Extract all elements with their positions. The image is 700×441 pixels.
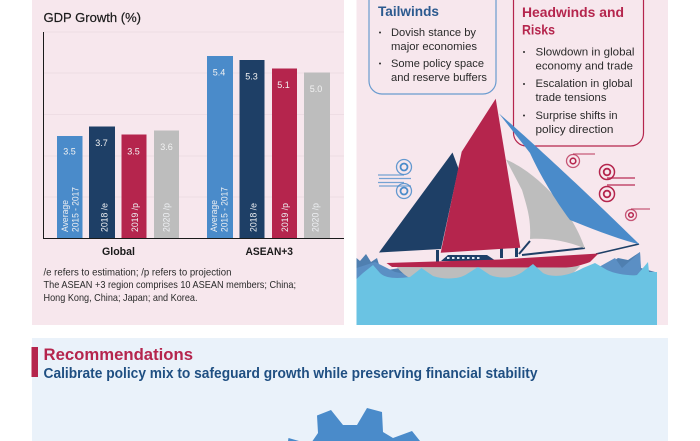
bar chart — [44, 32, 344, 238]
back waves — [356, 252, 657, 282]
illustration: sailboat — [356, 99, 657, 282]
callout: headwinds and risks: Risks — [522, 22, 555, 38]
bar chart: 5.4 — [213, 68, 225, 78]
subheading: Calibrate policy mix to safeguard growth while preserving financial stability — [44, 366, 538, 382]
axis label: Global: Global — [102, 246, 135, 258]
sea — [356, 262, 657, 325]
bar chart: 2015 - 2017 — [220, 187, 230, 232]
bar chart: 2020 /p — [310, 203, 322, 232]
sail: red — [441, 99, 520, 253]
bar chart: Average — [209, 200, 220, 232]
sail: grey — [506, 160, 585, 248]
callout: headwinds and risks: Headwinds and — [522, 4, 624, 20]
callout: headwinds and risks: Slowdown in global — [536, 46, 634, 58]
callout: tailwinds: Some policy space — [391, 58, 484, 70]
bar chart: 2019 /p — [130, 203, 141, 232]
bar chart: 2020 /p — [162, 203, 172, 232]
callout: headwinds and risks: economy and trade — [536, 60, 633, 72]
bar chart: 5.3 — [245, 72, 258, 82]
callout: tailwinds: Dovish stance by — [391, 27, 477, 39]
hull — [396, 266, 580, 280]
icon: gear — [288, 408, 420, 441]
bar chart: 3.7 — [95, 138, 108, 148]
sail: blue jib — [499, 114, 640, 244]
footnotes: Hong Kong, China; Japan; and Korea. — [44, 292, 198, 304]
masts and rigging — [438, 241, 639, 262]
sail: navy — [379, 152, 458, 252]
callout: tailwinds: major economies — [391, 41, 478, 53]
bar chart: 2018 /e — [248, 203, 260, 232]
callout: headwinds and risks: Surprise shifts in — [536, 110, 618, 122]
marker bar — [32, 347, 38, 377]
panel: GDP growth — [32, 0, 344, 325]
bar chart: 5.0 — [310, 84, 322, 94]
bar chart: Average — [60, 200, 71, 232]
footnotes: The ASEAN +3 region comprises 10 ASEAN members; China; — [44, 279, 296, 291]
axis label: ASEAN+3: ASEAN+3 — [246, 246, 293, 258]
callout: tailwinds: and reserve buffers — [391, 72, 488, 84]
callout: headwinds and risks: Escalation in global — [536, 78, 632, 90]
callout: headwinds and risks: policy direction — [536, 124, 614, 136]
bar chart: 3.5 — [127, 146, 140, 156]
icon: blue winds — [378, 160, 412, 198]
deck — [386, 254, 598, 268]
panel: tailwinds and headwinds — [356, 0, 668, 325]
callout: tailwinds: Tailwinds — [378, 3, 439, 19]
panel: recommendations — [32, 338, 668, 441]
icon: red winds — [566, 154, 650, 220]
bar chart: 5.1 — [277, 80, 290, 90]
bar chart: 3.6 — [160, 142, 173, 152]
bar chart: 2019 /p — [280, 203, 291, 232]
chart title: GDP Growth (%) — [44, 10, 141, 25]
footnotes: /e refers to estimation; /p refers to projection — [44, 266, 232, 278]
bar chart: 3.5 — [63, 146, 76, 156]
heading: Recommendations — [44, 345, 193, 364]
bar chart: 2018 /e — [100, 203, 110, 232]
bar chart: 2015 - 2017 — [70, 187, 82, 232]
callout: headwinds and risks — [514, 0, 644, 146]
callout: headwinds and risks: trade tensions — [536, 92, 607, 104]
callout: tailwinds — [369, 0, 496, 94]
cabin — [441, 255, 496, 261]
footnotes — [44, 266, 296, 304]
